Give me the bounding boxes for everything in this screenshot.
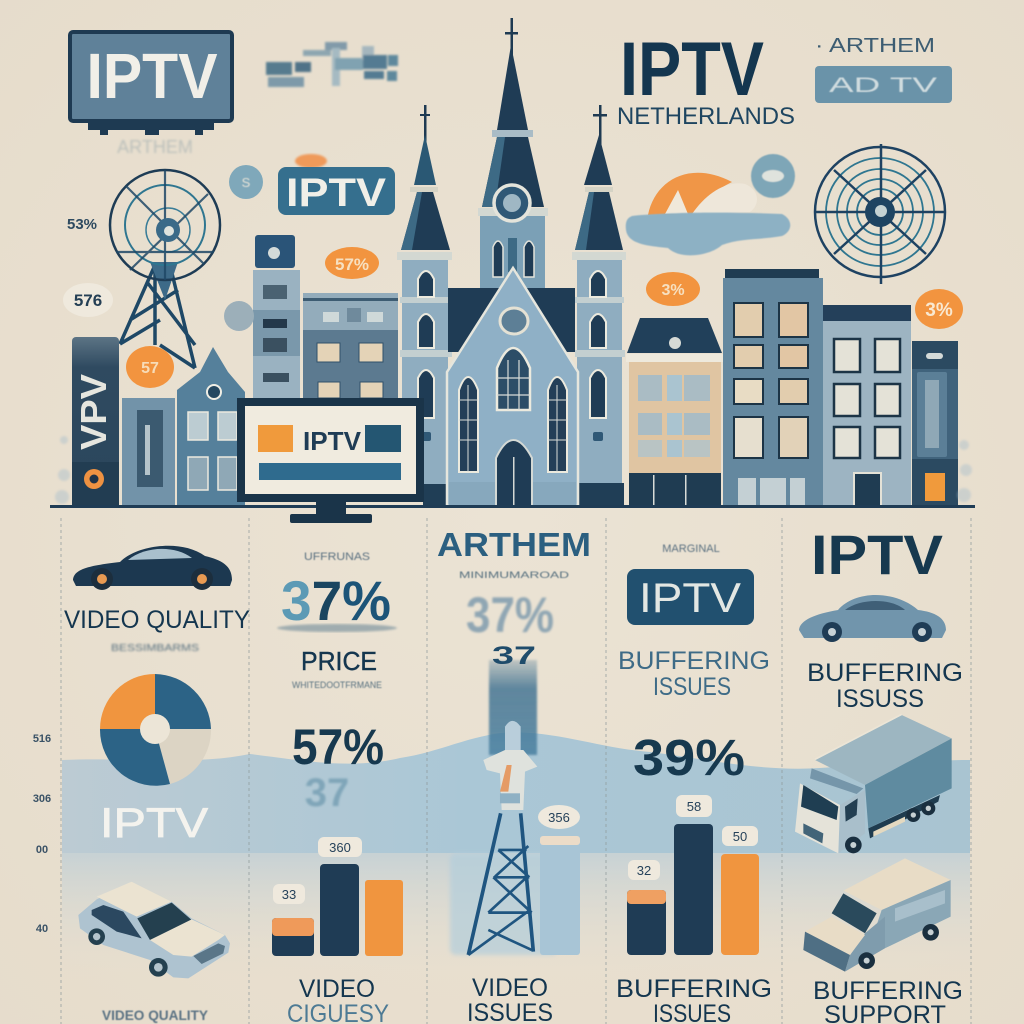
axis labels left: 516 <box>33 733 51 745</box>
label: video: VIDEO <box>472 974 548 1002</box>
building: grey block <box>823 305 911 507</box>
bar chart: 32 <box>637 863 651 878</box>
badge: IPTV <box>627 569 754 625</box>
label: percent bubble left: 576 <box>74 291 102 310</box>
blurred caption: BESSIMBARMS <box>111 643 199 654</box>
title: IPTV Netherlands: NETHERLANDS <box>617 103 795 130</box>
stat: 39%: 39% <box>633 729 745 786</box>
blurred caption: WHITEDOOTFRMANE <box>292 680 382 690</box>
bar chart: 33 <box>282 887 296 902</box>
column 5: IPTV: ISSUSS <box>836 685 924 713</box>
label: buffering issues: BUFFERING <box>807 659 963 687</box>
bubble: orange percent centre left <box>325 247 379 279</box>
badge: IPTV centre left <box>278 154 395 215</box>
icon: blue car <box>799 595 946 642</box>
label: price: PRICE <box>301 646 377 676</box>
bubble: orange percent tower: 57 <box>141 360 159 377</box>
building: back houses <box>253 235 398 402</box>
figure <box>483 721 537 810</box>
column 1: video quality <box>64 546 250 1023</box>
badge: IPTV centre left: IPTV <box>286 171 386 215</box>
caption: video quality: VIDEO QUALITY <box>102 1007 209 1023</box>
dark roof behind <box>448 288 575 352</box>
label: percent left: 53% <box>67 216 97 233</box>
main spire <box>478 18 548 290</box>
bar label: 356 <box>548 810 570 825</box>
pie chart <box>100 674 211 786</box>
column 3: arthem <box>437 526 591 1024</box>
building: tall blue block <box>723 269 823 507</box>
building: left VPV tower <box>72 337 119 506</box>
shadow bar <box>277 624 397 632</box>
bar chart: 58 <box>687 799 701 814</box>
circle ornament <box>224 301 254 331</box>
blurred caption: MINIMUMAROAD <box>459 570 570 580</box>
icon: dark car <box>73 546 232 590</box>
column 5: IPTV <box>795 523 963 1024</box>
icon: grey car <box>78 882 230 978</box>
column 4: buffering: ISSUES <box>653 673 731 701</box>
illustration: orange sun and cloud <box>626 173 790 255</box>
bubble: orange percent far right: 3% <box>925 300 953 321</box>
building: right narrow <box>912 341 958 507</box>
column 2: price <box>272 551 403 1024</box>
bubble: orange percent right: 3% <box>661 282 685 299</box>
stat: 57%: 57% <box>292 719 384 775</box>
building: beige house <box>626 318 723 507</box>
badge: AD TV: AD TV <box>829 74 937 97</box>
illustration: church <box>397 18 626 506</box>
bar chart <box>627 795 759 955</box>
blurred caption: MARGINAL <box>662 543 720 555</box>
stat: 37% faded: 37% <box>466 587 554 643</box>
faded beam <box>489 660 537 755</box>
bar chart: 360 <box>329 840 351 855</box>
title: IPTV Netherlands: IPTV <box>620 27 764 112</box>
icon: central TV: IPTV <box>303 426 362 456</box>
shrubs <box>55 436 972 504</box>
building: left VPV tower: VPV <box>73 374 114 450</box>
faded label: ARTHEM: ARTHEM <box>117 137 193 157</box>
icon: small round badge: S <box>242 175 251 190</box>
label: IPTV white: IPTV <box>100 799 208 846</box>
label: video: VIDEO <box>299 975 375 1003</box>
icon: central TV <box>241 402 420 523</box>
stat: 37: 37 <box>492 642 536 670</box>
heading: arthem: ARTHEM <box>437 526 591 563</box>
stat: 37%: 37% <box>281 569 391 632</box>
heading: IPTV: IPTV <box>811 523 943 586</box>
bubble: orange percent centre left: 57% <box>335 255 369 274</box>
nave <box>447 268 578 506</box>
icon: radar web right <box>815 144 945 284</box>
blurred caption: UFFRUNAS <box>304 551 370 563</box>
label: video quality: VIDEO QUALITY <box>64 606 250 634</box>
icon: IPTV monitor top left <box>70 32 232 135</box>
bar chart: 50 <box>733 829 747 844</box>
left tower <box>397 105 452 506</box>
axis labels left: 306 <box>33 793 51 805</box>
badge: IPTV: IPTV <box>639 574 741 621</box>
icon: blurred skyline top <box>266 42 398 87</box>
icon: small round badge right <box>751 154 795 198</box>
ground line <box>50 505 975 508</box>
axis labels left: 00 <box>36 844 48 856</box>
label: buffering issues: BUFFERING <box>618 647 770 675</box>
axis labels left: 40 <box>36 923 48 935</box>
badge: AD TV <box>815 66 952 103</box>
bubble: orange percent right <box>646 272 700 306</box>
icon: truck <box>795 714 952 853</box>
bar label <box>538 805 580 829</box>
column 4: buffering <box>616 543 772 1024</box>
bar chart <box>272 837 403 956</box>
bubble: orange percent far right <box>915 289 963 329</box>
axis labels left <box>33 733 51 935</box>
icon: small round badge <box>229 165 263 199</box>
bar: light blue <box>540 836 580 955</box>
label: percent bubble left <box>63 283 113 317</box>
icon: van <box>803 858 951 972</box>
blue wave band <box>62 732 970 983</box>
right tower <box>572 105 626 506</box>
icon: radio tower left <box>110 170 220 368</box>
brand label: ARTHEM: · ARTHEM <box>815 35 935 57</box>
icon: IPTV monitor top left: IPTV <box>86 40 218 112</box>
label: buffering issues bottom: BUFFERING <box>616 975 772 1003</box>
bubble: orange percent tower <box>126 346 174 388</box>
label: buffering support: BUFFERING <box>813 977 963 1005</box>
building: left row houses <box>122 347 245 506</box>
stat ghost: 37 <box>305 771 349 815</box>
icon: lattice tower <box>468 813 533 955</box>
column dividers <box>61 518 971 1024</box>
